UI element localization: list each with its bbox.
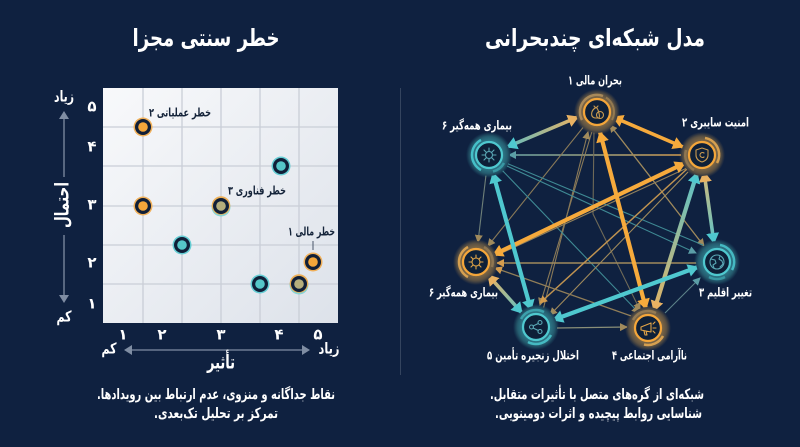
caption: network model: شناسایی روابط پیچیده و اثرات دومینویی. — [495, 406, 702, 422]
x axis ticks — [118, 326, 323, 344]
x axis title and arrows: کم — [102, 340, 117, 358]
x axis ticks: ۲ — [157, 326, 167, 344]
x axis ticks: ۱ — [118, 326, 128, 344]
label: technology risk: خطر فناوری ۳ — [228, 184, 286, 198]
point: teal upper — [272, 156, 290, 176]
x axis title and arrows — [102, 340, 340, 374]
icon: money bag — [592, 106, 604, 118]
label: social unrest: ناآرامی اجتماعی ۴ — [612, 348, 687, 362]
x axis title and arrows: تأثیر — [206, 350, 235, 374]
label: pandemic top: بیماری همه‌گیر ۶ — [442, 118, 512, 132]
y axis ticks: ۵ — [87, 98, 97, 116]
y axis ticks: ۳ — [87, 196, 97, 214]
icon: virus teal — [482, 148, 496, 162]
label: climate change: تغییر اقلیم ۳ — [699, 284, 752, 300]
label: pandemic bottom: بیماری همه‌گیر ۶ — [429, 284, 498, 300]
icon: globe — [710, 255, 724, 269]
node: pandemic orange — [453, 239, 499, 285]
label: operational risk: خطر عملیاتی ۲ — [149, 106, 211, 120]
node: social unrest — [625, 305, 671, 351]
node: pandemic teal — [466, 132, 512, 178]
point: orange middle — [134, 196, 152, 216]
panel: scatter chart — [52, 88, 340, 374]
y axis title and arrows: زیاد — [54, 88, 74, 106]
x axis ticks: ۴ — [274, 326, 284, 344]
icon: virus orange — [469, 255, 483, 269]
label: financial crisis: بحران مالی ۱ — [568, 72, 622, 88]
point: mixed lower right — [290, 274, 308, 294]
title: network model: مدل شبکه‌ای چندبحرانی — [485, 24, 705, 52]
icon: megaphone — [641, 322, 656, 335]
point: teal lower — [250, 274, 270, 294]
y axis ticks — [87, 98, 97, 312]
caption: traditional risk — [97, 385, 335, 422]
node: financial crisis — [574, 89, 620, 135]
label: supply chain disruption: اختلال زنجیره تأمین ۵ — [487, 346, 579, 362]
point: teal lower left — [172, 236, 192, 254]
label: financial risk: خطر مالی ۱ — [288, 224, 335, 238]
caption: network model: شبکه‌ای از گره‌های متصل با تأثیرات متقابل. — [490, 385, 704, 403]
y axis ticks: ۴ — [87, 138, 97, 156]
y axis title and arrows — [52, 88, 74, 326]
y axis title and arrows: احتمال — [52, 182, 74, 228]
title: traditional risk: خطر سنتی مجزا — [132, 24, 280, 52]
x axis ticks: ۵ — [313, 326, 323, 344]
node: climate change — [694, 239, 740, 285]
node: supply chain disruption — [513, 304, 559, 350]
y axis ticks: ۱ — [87, 294, 97, 312]
node: cyber security — [679, 132, 725, 178]
icon: share nodes — [530, 320, 542, 334]
point: technology risk — [212, 196, 230, 216]
x axis title and arrows: زیاد — [318, 340, 340, 358]
network links — [478, 117, 714, 328]
caption: traditional risk: نقاط جداگانه و منزوی، عدم ارتباط بین رویدادها. — [97, 385, 335, 403]
label: cyber security: امنیت سایبری ۲ — [682, 114, 749, 130]
point: operational risk — [134, 118, 152, 136]
point: financial risk — [304, 252, 322, 272]
thick links — [488, 117, 714, 320]
caption: network model — [490, 385, 704, 422]
caption: traditional risk: تمرکز بر تحلیل تک‌بعدی. — [154, 406, 278, 422]
plot area — [103, 88, 338, 323]
icon: shield — [696, 148, 708, 162]
y axis title and arrows: کم — [56, 308, 72, 326]
y axis ticks: ۲ — [87, 254, 97, 272]
x axis ticks: ۳ — [216, 326, 226, 344]
thin links — [478, 125, 704, 328]
